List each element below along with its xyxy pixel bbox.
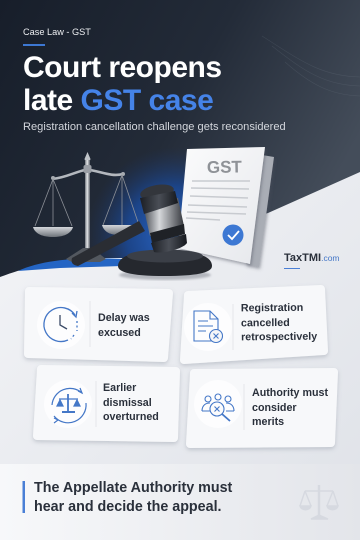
footer band — [0, 464, 360, 540]
title — [23, 51, 222, 117]
icon: watermark scales — [300, 485, 338, 519]
panel: card dismissal — [37, 369, 176, 438]
card text: dismissal — [103, 382, 159, 423]
card text: authority: Authority must — [252, 387, 328, 399]
brand underline — [284, 268, 300, 269]
blue swoosh — [18, 258, 122, 271]
card text: registration: Registration — [241, 302, 303, 314]
eyebrow label: Case Law - GST — [23, 27, 91, 37]
light lower background — [0, 172, 360, 540]
card text: authority: merits — [252, 416, 284, 428]
footer statement — [34, 480, 232, 514]
icon disc backgrounds — [37, 301, 242, 428]
panel: card registration — [184, 289, 324, 360]
card text: registration: retrospectively — [241, 331, 317, 344]
panel: card delay — [28, 291, 169, 358]
footer accent bar — [22, 481, 25, 513]
icon: clock — [44, 308, 77, 342]
card text: registration: cancelled — [241, 317, 290, 329]
card text: dismissal: dismissal — [103, 397, 152, 409]
subtitle: Registration cancellation challenge gets reconsidered — [23, 121, 286, 133]
icon: cancelled document — [194, 311, 222, 342]
card text: delay: Delay was — [98, 312, 150, 324]
title: late GST case — [23, 84, 213, 117]
card text: dismissal: overturned — [103, 411, 159, 423]
title: Court reopens — [23, 51, 222, 84]
icon: check badge — [222, 224, 244, 246]
icon: scales in arrows — [52, 388, 86, 423]
icon: gavel — [72, 182, 212, 280]
card text: dismissal: Earlier — [103, 382, 136, 394]
panel: card authority — [190, 372, 334, 444]
card text: authority — [252, 387, 328, 428]
eyebrow underline — [23, 44, 45, 46]
footer statement: The Appellate Authority must — [34, 480, 232, 496]
footer statement: hear and decide the appeal. — [34, 498, 222, 514]
icon: scales of justice — [33, 152, 141, 262]
card text: delay — [98, 312, 150, 339]
card text: delay: excused — [98, 327, 141, 339]
brand logo: TaxTMI.com — [284, 252, 340, 264]
card text: authority: consider — [252, 402, 297, 414]
card text: registration — [241, 302, 318, 344]
icon: people and magnifier — [202, 394, 234, 421]
icon: GST document — [178, 147, 274, 267]
GST label on the document: GST — [207, 157, 243, 177]
